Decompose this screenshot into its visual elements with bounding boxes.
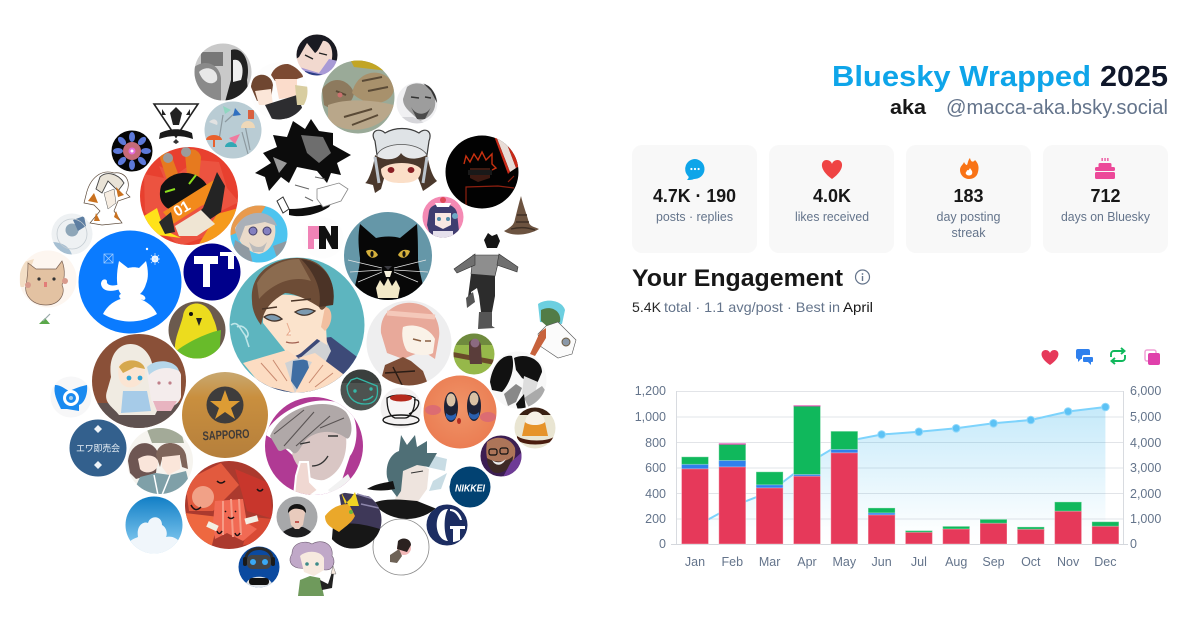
avatar: monochrome couple <box>193 42 253 102</box>
stat card: days on Bluesky <box>1043 145 1168 253</box>
label: day posting <box>936 209 1000 224</box>
avatar: エワ即売会 logo <box>70 420 126 476</box>
icon: likes <box>1042 350 1058 365</box>
avatar: sorting hat <box>504 196 539 235</box>
avatar: kimono couple <box>126 427 194 495</box>
avatar: cream cat <box>18 249 78 309</box>
handle: @macca-aka.bsky.social <box>946 97 1168 119</box>
left axis labels: 1,000 <box>635 410 666 424</box>
avatar: teal smiley robot <box>340 369 382 411</box>
month labels: Sep <box>982 555 1005 569</box>
right axis labels: 6,000 <box>1130 384 1161 398</box>
avatar: sky and clouds <box>124 495 184 555</box>
avatar: Nikkei logo: NIKKEI <box>455 484 485 494</box>
avatar: outlined circle with tiny figure <box>373 519 429 575</box>
left axis labels: 800 <box>645 436 666 450</box>
title: Bluesky Wrapped <box>832 61 1091 93</box>
right axis labels: 0 <box>1130 537 1137 551</box>
avatar: black and red silhouette <box>444 134 520 210</box>
avatar: robot with headphones <box>238 546 280 588</box>
right axis labels: 3,000 <box>1130 461 1161 475</box>
label second line: streak <box>952 225 986 240</box>
cumulative line <box>695 407 1105 527</box>
left axis labels: 600 <box>645 461 666 475</box>
replies segments <box>682 450 895 516</box>
broken image icon <box>39 314 50 325</box>
left axis labels: 0 <box>659 537 666 551</box>
month labels <box>685 555 1117 569</box>
avatar: Sapporo beer <box>182 372 268 458</box>
icon: reposts <box>1111 348 1125 364</box>
avatar: chibi with white hood <box>365 128 437 193</box>
avatar: grey-haired man with finger to lips <box>264 396 364 496</box>
avatar: custard pudding <box>514 407 556 449</box>
month labels: May <box>832 555 857 569</box>
avatar: monochrome long-haired pair <box>490 354 545 408</box>
label: days on Bluesky <box>1061 209 1150 224</box>
icon: birthday cake <box>1095 158 1115 179</box>
cumulative area <box>695 407 1105 544</box>
stat card: posts and replies <box>632 145 757 253</box>
avatar: sketched orange-haired character <box>84 172 130 225</box>
avatar: purple eagle <box>325 492 382 548</box>
avatar cluster <box>18 34 576 596</box>
likes segments <box>682 453 1119 544</box>
quotes segments <box>719 405 820 445</box>
reposts segments <box>682 406 1119 534</box>
title year: 2025 <box>1100 61 1168 93</box>
stacked bars <box>682 405 1119 544</box>
right axis labels: 1,000 <box>1130 512 1161 526</box>
avatar: Sapporo beer: SAPPORO <box>202 427 250 443</box>
label: likes received <box>795 209 869 224</box>
engagement heading: Your Engagement <box>632 265 843 292</box>
avatar: pink background anime girl <box>422 196 464 238</box>
value: 183 <box>954 186 984 206</box>
left axis labels: 400 <box>645 487 666 501</box>
stat card: likes received <box>769 145 894 253</box>
avatar: small photo on grass <box>453 333 495 375</box>
value: 4.0K <box>813 186 851 206</box>
avatar: blue butterfly icon <box>50 376 92 418</box>
month labels: Feb <box>722 555 743 569</box>
avatar: green-haired figure with cyan hood <box>530 301 576 358</box>
avatar: Nikkei logo <box>450 466 490 508</box>
month labels: Oct <box>1021 555 1041 569</box>
avatar: red pepper plush pile <box>183 459 275 551</box>
month labels: Apr <box>797 555 817 569</box>
value: 4.7K · 190 <box>653 186 736 206</box>
avatar: bald man portrait <box>396 81 438 124</box>
left axis labels <box>635 384 666 551</box>
avatar: Guardian G logo <box>426 504 468 546</box>
avatar: purple-haired girl in green <box>290 542 336 596</box>
display name: aka <box>890 97 927 119</box>
avatar: dark-haired man with blue hair <box>367 435 451 519</box>
avatar: triangle emblem <box>154 104 198 144</box>
avatar: PN logo <box>302 218 344 258</box>
icon: replies <box>1076 349 1093 365</box>
avatar: pale blue abstract <box>51 213 93 255</box>
icon: quotes <box>1145 350 1160 365</box>
avatar: napping cats photo <box>320 59 396 135</box>
avatar: black cat <box>343 211 433 301</box>
month labels: Jan <box>685 555 705 569</box>
avatar: mandala <box>112 130 152 172</box>
line points <box>840 403 1109 446</box>
avatar: small portrait with black hair <box>296 34 338 76</box>
avatar: bearded man with glasses <box>480 435 522 477</box>
avatar: navy T logo <box>182 242 242 302</box>
avatar: black and white spiky-haired character <box>255 119 351 216</box>
engagement summary: April <box>843 299 873 315</box>
avatar: brown-haired boy making a finger heart <box>227 255 367 395</box>
chart legend <box>1042 348 1160 365</box>
avatar: Kirby close-up <box>422 374 498 450</box>
engagement summary: total · 1.1 avg/post · Best in <box>664 299 840 315</box>
engagement summary: 5.4K <box>632 299 662 315</box>
month labels: Dec <box>1094 555 1117 569</box>
avatar: cup of tea <box>380 388 422 428</box>
avatar: bob-haired girl <box>365 299 453 387</box>
month labels: Nov <box>1057 555 1080 569</box>
icon: info <box>856 270 870 284</box>
left axis labels: 200 <box>645 512 666 526</box>
avatar: short-haired woman portrait <box>276 496 318 538</box>
avatar: red robot penguin: 01 <box>170 197 193 220</box>
label: posts · replies <box>656 209 733 224</box>
avatar: エワ即売会 logo: エワ即売会 <box>76 442 120 454</box>
icon: flame <box>960 158 979 179</box>
avatar: running figure <box>454 233 518 329</box>
avatar: red robot penguin <box>139 146 239 246</box>
avatar: blue cat logo <box>78 230 182 334</box>
avatar: plush dolls <box>91 333 187 429</box>
month labels: Jul <box>911 555 927 569</box>
avatar: grey-haired man with glasses <box>229 204 289 264</box>
month labels: Mar <box>759 555 780 569</box>
icon: heart <box>822 160 842 179</box>
left axis labels: 1,200 <box>635 384 666 398</box>
avatar: budgie <box>167 300 227 360</box>
icon: chat bubble <box>685 159 705 180</box>
avatar: lamps pattern <box>203 100 263 160</box>
right axis labels <box>1130 384 1161 551</box>
month labels: Jun <box>872 555 892 569</box>
header <box>832 61 1168 119</box>
month labels: Aug <box>945 555 967 569</box>
grid lines <box>671 391 1128 544</box>
right axis labels: 5,000 <box>1130 410 1161 424</box>
avatar: brown-haired pair <box>251 64 308 120</box>
right axis labels: 4,000 <box>1130 436 1161 450</box>
value: 712 <box>1090 186 1120 206</box>
stat card: day posting streak <box>906 145 1031 253</box>
right axis labels: 2,000 <box>1130 487 1161 501</box>
engagement chart <box>635 384 1161 569</box>
